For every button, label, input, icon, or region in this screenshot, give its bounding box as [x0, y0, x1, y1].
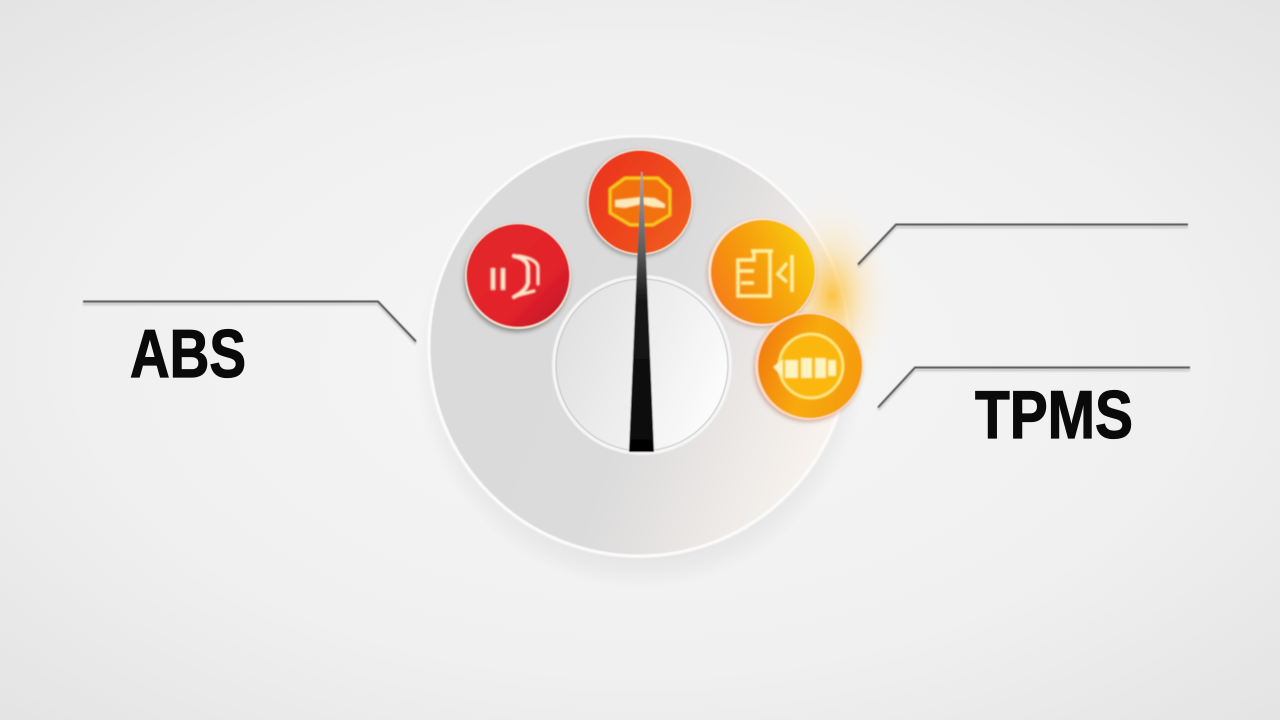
- leader line: upper right: [858, 224, 1188, 267]
- warning button: orange: [707, 218, 816, 328]
- leader line: ABS: [83, 302, 416, 344]
- needle: [629, 172, 654, 452]
- label: TPMS: TPMS: [975, 377, 1133, 453]
- amber glow: [770, 196, 894, 396]
- warning button: ABS: [464, 223, 571, 332]
- leader line: TPMS: [878, 368, 1190, 410]
- warning button: TPMS: [754, 312, 863, 422]
- gauge dial: [416, 136, 894, 588]
- warning button: center: [586, 149, 693, 257]
- center knob: [552, 275, 732, 455]
- label: ABS: ABS: [130, 316, 246, 392]
